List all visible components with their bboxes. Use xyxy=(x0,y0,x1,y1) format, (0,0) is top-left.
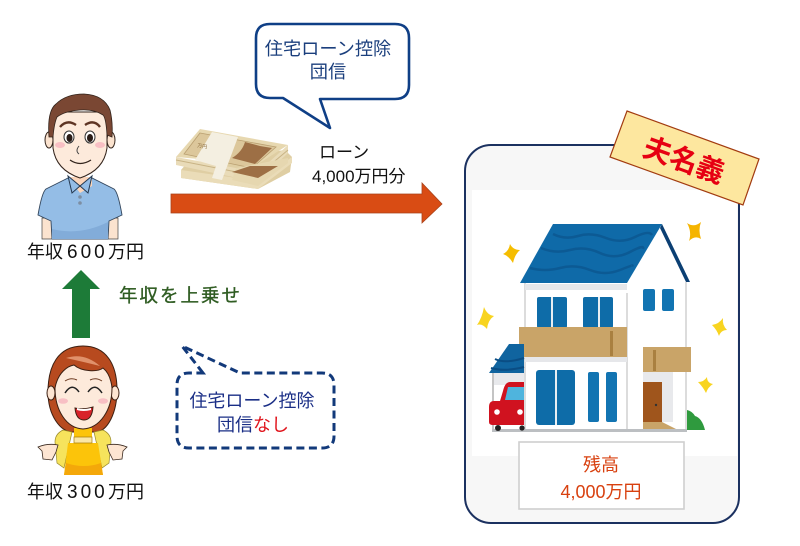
icon: sparkle xyxy=(712,318,727,336)
callout: wife no deduction xyxy=(177,346,334,448)
label: husband income: 年収 xyxy=(27,242,63,262)
callout text: 住宅ローン控除 xyxy=(189,391,315,411)
icon: money bundles: 万円 xyxy=(197,143,208,151)
label box: balance xyxy=(519,442,684,509)
arrow: loan to house xyxy=(171,183,442,223)
text: add income: 年収を上乗せ xyxy=(119,285,242,306)
icon: wife xyxy=(38,346,127,475)
label box: balance: 残高 xyxy=(583,455,619,475)
callout text: 住宅ローン控除 xyxy=(265,39,391,59)
label: wife income: 万円 xyxy=(108,482,144,502)
label: loan amount xyxy=(312,143,406,186)
label: wife income: 300 xyxy=(67,482,108,503)
callout: husband deductions: 団信 xyxy=(310,62,346,82)
label box: balance: 4,000万円 xyxy=(560,482,642,502)
stamp: husband's name xyxy=(610,111,759,205)
icon: house xyxy=(489,224,705,432)
callout: husband deductions xyxy=(256,24,409,128)
arrow: income added xyxy=(62,270,100,338)
stamp: husband's name: 夫名義 xyxy=(639,132,729,189)
label: wife income: 年収 xyxy=(27,482,63,502)
icon: sparkle xyxy=(477,307,494,329)
callout: wife no deduction: 団信なし xyxy=(217,415,289,435)
icon: husband xyxy=(38,94,122,239)
label: husband income: 万円 xyxy=(108,242,144,262)
icon: sparkle xyxy=(698,377,713,393)
label: loan amount: ローン xyxy=(319,143,369,162)
label: husband income: 600 xyxy=(67,242,108,263)
icon: sparkle xyxy=(503,244,520,263)
panel: house card xyxy=(465,145,739,523)
icon: sparkle xyxy=(687,222,701,241)
label: loan amount: 4,000万円分 xyxy=(312,167,406,186)
icon: money bundles xyxy=(176,129,292,189)
